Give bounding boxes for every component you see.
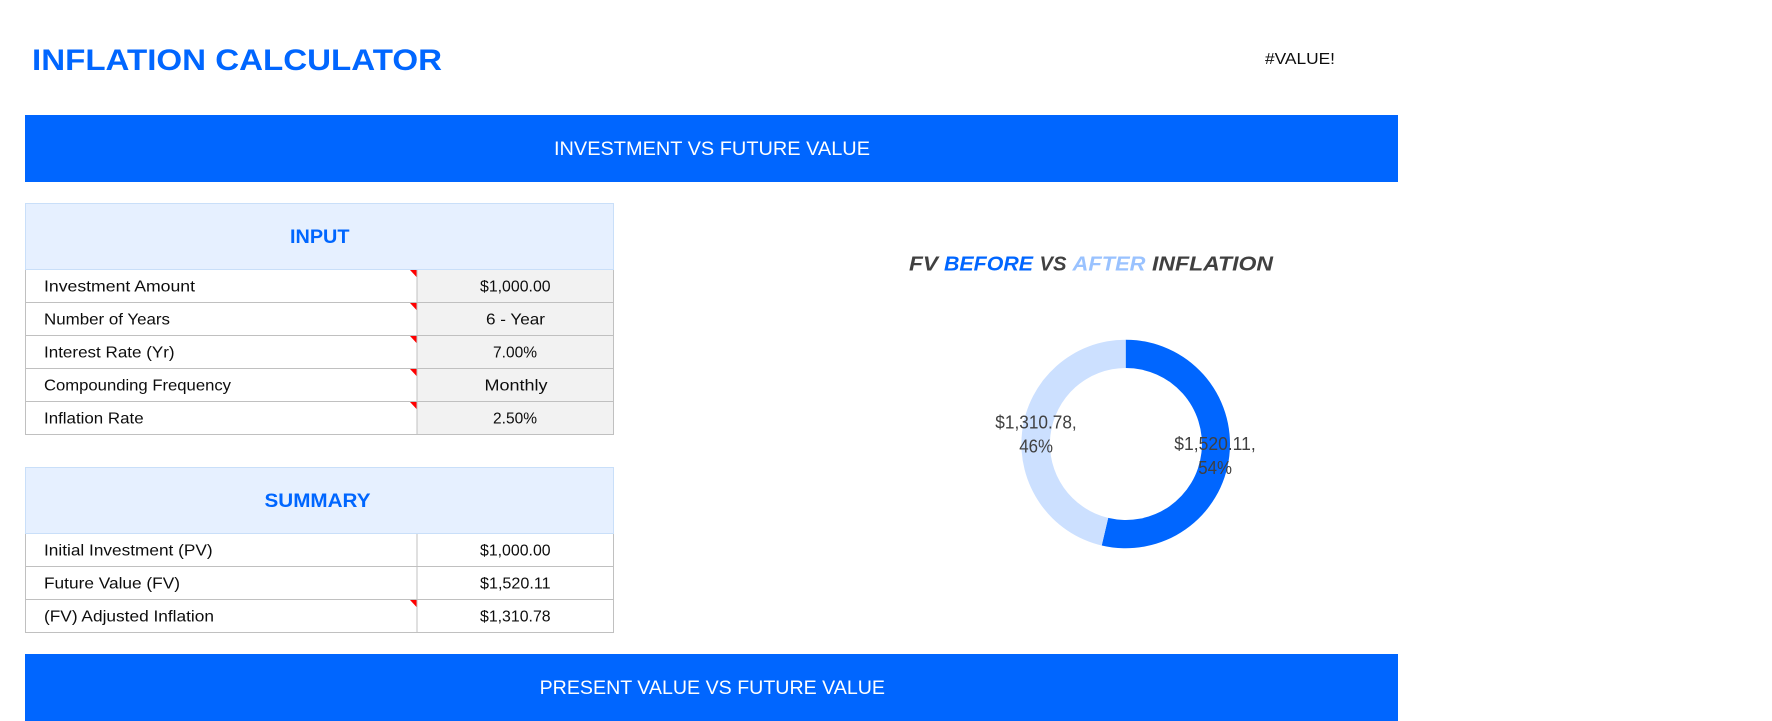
input row: compounding frequency (44, 369, 548, 395)
chart title: FV (909, 254, 940, 276)
summary grid (26, 534, 614, 632)
input row: investment amount: $1,000.00 (480, 279, 551, 296)
chart title: BEFORE (944, 254, 1034, 276)
summary heading (26, 468, 614, 534)
input row: interest rate: 7.00% (493, 345, 537, 362)
chart title: AFTER (1071, 254, 1146, 276)
input row: inflation rate: Inflation Rate (44, 411, 144, 428)
summary row: future value (44, 576, 551, 593)
chart title: INFLATION (1152, 254, 1274, 276)
summary row: adjusted inflation: (FV) Adjusted Inflation (44, 609, 214, 626)
input row: inflation rate (44, 402, 537, 428)
summary heading: SUMMARY (264, 491, 371, 512)
data label: before inflation (1174, 434, 1256, 478)
input heading (26, 204, 614, 270)
input heading: INPUT (290, 227, 350, 248)
summary row: adjusted inflation (44, 600, 551, 626)
input row: number of years: 6 - Year (486, 312, 546, 329)
input row: investment amount (44, 270, 551, 296)
data label: before inflation: $1,520.11, (1174, 434, 1256, 454)
summary row: initial investment: $1,000.00 (480, 543, 551, 560)
input row: number of years: Number of Years (44, 312, 170, 329)
banner: present value vs future value (25, 654, 1398, 721)
banner: present value vs future value: PRESENT VALUE VS FUTURE VALUE (540, 678, 885, 699)
data label: after inflation (995, 413, 1077, 457)
chart title: VS (1040, 254, 1067, 276)
summary row: future value: Future Value (FV) (44, 576, 180, 593)
data label: after inflation: 46% (1019, 437, 1053, 457)
panel: summary table (26, 468, 614, 632)
data label: after inflation: $1,310.78, (995, 413, 1077, 433)
input row: inflation rate: 2.50% (493, 411, 537, 428)
summary row: initial investment (44, 543, 551, 560)
title: INFLATION CALCULATOR (32, 44, 442, 77)
input value cells background (417, 270, 614, 434)
data label: before inflation: 54% (1198, 458, 1232, 478)
segment: future value after inflation (1021, 340, 1126, 546)
summary row: adjusted inflation: $1,310.78 (480, 609, 551, 626)
input grid (26, 270, 614, 434)
error value text: #VALUE! (1265, 51, 1335, 68)
input row: compounding frequency: Compounding Frequency (44, 378, 231, 395)
summary row: initial investment: Initial Investment (PV) (44, 543, 213, 560)
summary row: future value: $1,520.11 (480, 576, 551, 593)
chart title (909, 254, 1274, 276)
input row: number of years (44, 303, 546, 329)
banner: investment vs future value (25, 115, 1398, 182)
input row: interest rate: Interest Rate (Yr) (44, 345, 175, 362)
banner: investment vs future value: INVESTMENT VS FUTURE VALUE (554, 139, 870, 160)
input row: investment amount: Investment Amount (44, 279, 196, 296)
panel: input table (26, 204, 614, 434)
segment: future value before inflation (1102, 340, 1230, 548)
input row: interest rate (44, 336, 537, 362)
input row: compounding frequency: Monthly (484, 378, 548, 395)
donut chart (995, 340, 1256, 548)
